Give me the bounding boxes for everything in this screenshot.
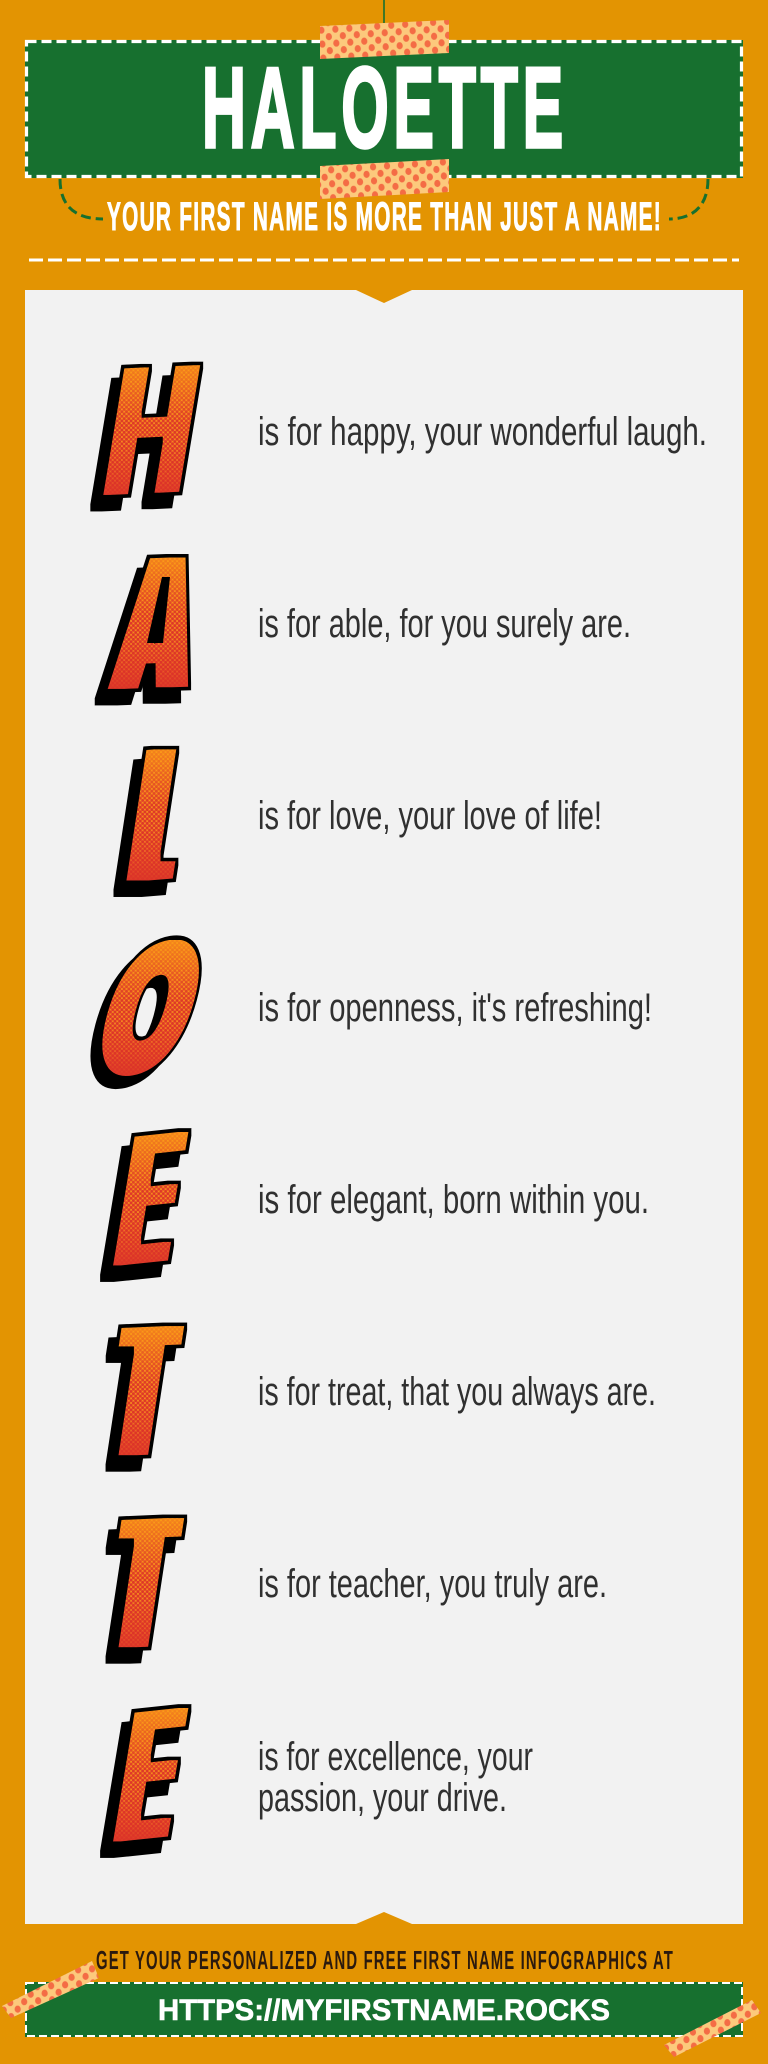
- footer url banner: [25, 1982, 743, 2037]
- text: A line: is for able, for you surely are.: [258, 602, 631, 646]
- dashed connector right: [669, 179, 708, 219]
- letter T second: T: [93, 1491, 172, 1710]
- title banner: [25, 40, 743, 178]
- letter E second: [100, 1704, 192, 1858]
- letter E: E: [99, 1089, 201, 1315]
- washi tape: footer left: [2, 1961, 99, 2018]
- letter H: H: [88, 325, 215, 542]
- dashed connector left: [60, 179, 103, 219]
- letter H: [90, 362, 204, 512]
- letter T: [106, 1322, 188, 1472]
- letter O: O: [70, 920, 211, 1122]
- letter O: [90, 935, 202, 1090]
- letter A: [94, 554, 192, 706]
- text: L line: is for love, your love of life!: [258, 794, 602, 838]
- panel: acrostic: [25, 290, 743, 1924]
- text: T second line: is for teacher, you truly are.: [258, 1562, 607, 1606]
- letter E second: E: [99, 1665, 201, 1891]
- letter T second: [106, 1514, 188, 1664]
- letter E: [100, 1128, 192, 1282]
- text: E second line: is for excellence, your: [258, 1735, 533, 1779]
- letter L: L: [114, 718, 180, 945]
- washi tape: top: [320, 20, 449, 59]
- text: E second line: passion, your drive.: [258, 1776, 507, 1820]
- text: E second line: [258, 1735, 533, 1820]
- letter T: T: [93, 1299, 172, 1518]
- letter O: O: [79, 911, 220, 1113]
- letter A: A: [106, 517, 207, 736]
- hanging string: [383, 0, 385, 24]
- letter H: H: [78, 338, 205, 555]
- letter E second: E: [89, 1678, 191, 1904]
- letter A: A: [96, 530, 197, 749]
- dashed divider: [29, 258, 739, 262]
- letter L: [113, 746, 180, 897]
- letter E: E: [89, 1102, 191, 1328]
- letter L: L: [124, 705, 190, 932]
- footer url: HTTPS://MYFIRSTNAME.ROCKS: [158, 1994, 610, 2027]
- washi tape: bottom: [320, 159, 449, 199]
- letter T second: T: [103, 1478, 182, 1697]
- washi tape: footer right: [664, 2000, 761, 2057]
- letter T: T: [103, 1286, 182, 1505]
